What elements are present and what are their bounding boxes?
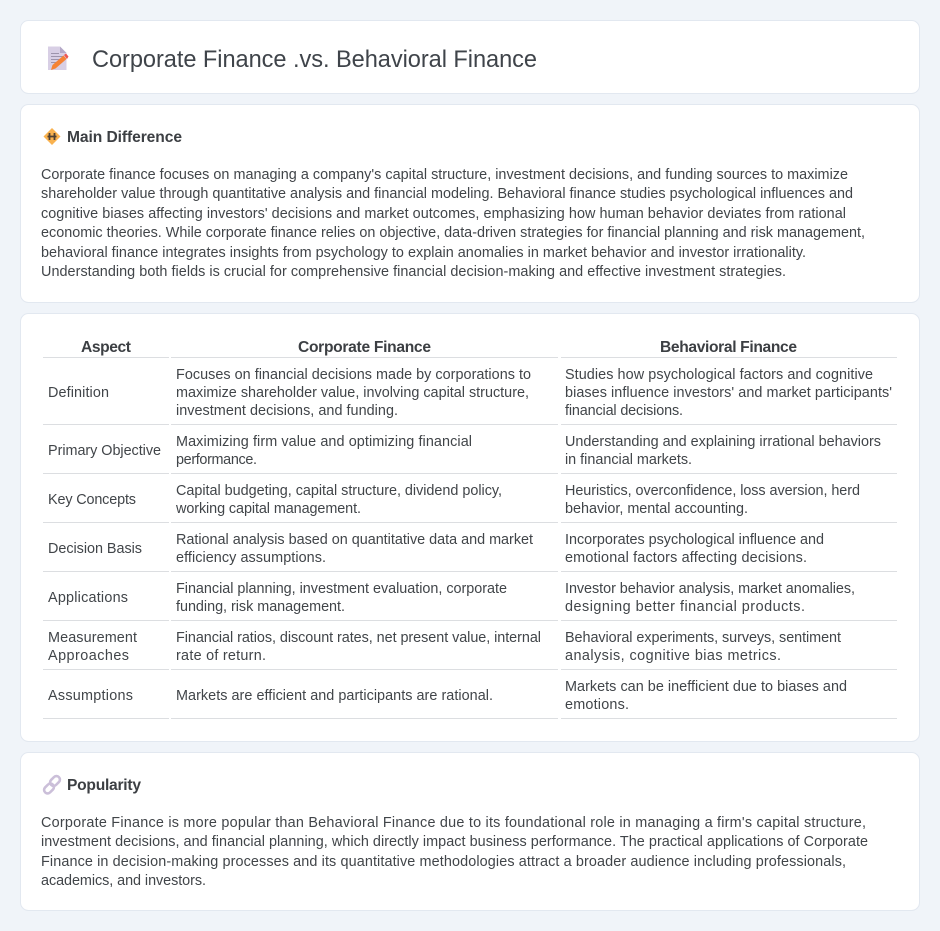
text block: popularity paragraph: Corporate Finance is more popular than Behavioral Finance due to its foundational role in managing a firm's capital structure,	[41, 815, 866, 831]
row: assumptions: Markets are efficient and participants are rational.	[176, 688, 493, 704]
row: measurement approaches: Behavioral experiments, surveys, sentiment	[565, 630, 841, 646]
text block: main difference paragraph: Corporate finance focuses on managing a company's capital structure, investment decisions, and funding sources to maximize	[41, 167, 848, 183]
row: decision basis: Rational analysis based on quantitative data and market	[176, 532, 533, 548]
row: primary objective: Maximizing firm value and optimizing financial	[176, 434, 472, 450]
text block: popularity paragraph: academics, and investors.	[41, 873, 206, 889]
row: definition: Studies how psychological factors and cognitive	[565, 367, 873, 383]
table header: Corporate Finance	[298, 339, 431, 356]
row: measurement approaches: Financial ratios, discount rates, net present value, internal	[176, 630, 541, 646]
row: decision basis: Incorporates psychological influence and	[565, 532, 824, 548]
table header	[81, 339, 797, 356]
title: Corporate Finance .vs. Behavioral Finance	[92, 47, 537, 73]
row: definition: financial decisions.	[565, 403, 683, 419]
row: key concepts	[48, 483, 860, 517]
row: definition: Focuses on financial decisions made by corporations to	[176, 367, 531, 383]
row: measurement approaches: Measurement	[48, 630, 137, 646]
table header: Aspect	[81, 339, 131, 356]
text block: main difference paragraph: shareholder value through quantitative analysis and financial modeling. Behavioral finance studies psychological influences and	[41, 186, 853, 202]
row: primary objective: in financial markets.	[565, 452, 692, 468]
text block: popularity paragraph: investment decisions, and financial planning, which directly impact business performance. The practical applications of Corporate	[41, 834, 868, 850]
row: applications: funding, risk management.	[176, 599, 345, 615]
row: primary objective: performance.	[176, 452, 257, 468]
panel: main difference	[20, 104, 920, 302]
text block: main difference paragraph: behavioral finance integrates insights from psychology to explain anomalies in market behavior and investor irrationality.	[41, 245, 806, 261]
row: definition: Definition	[48, 385, 109, 401]
panel: comparison table	[20, 314, 920, 742]
row: applications	[48, 581, 855, 615]
row: key concepts: working capital management.	[175, 501, 361, 517]
table header: Behavioral Finance	[660, 339, 797, 356]
text block: main difference paragraph: Understanding both fields is crucial for comprehensive financial decision-making and effective investment strategies.	[41, 264, 786, 280]
panel: popularity	[20, 752, 920, 910]
row: measurement approaches: Approaches	[48, 648, 129, 664]
heading: main difference: Main Difference	[67, 129, 182, 146]
row: definition: maximize shareholder value, involving capital structure,	[176, 385, 529, 401]
icon: chain link	[43, 775, 61, 795]
row: primary objective	[48, 434, 881, 468]
row: applications: Applications	[48, 590, 128, 606]
row: primary objective: Understanding and explaining irrational behaviors	[565, 434, 881, 450]
row: measurement approaches: rate of return.	[176, 648, 266, 664]
row: measurement approaches: analysis, cognitive bias metrics.	[565, 648, 781, 664]
text block: main difference paragraph: cognitive biases affecting investors' decisions and market outcomes, emphasizing how human behavior deviates from rational	[41, 206, 846, 222]
text block: popularity paragraph: Finance in decision-making processes and its quantitative methodologies attract a broader audience including professionals,	[41, 854, 846, 870]
row: key concepts: Key Concepts	[48, 492, 136, 508]
row: key concepts: behavior, mental accounting.	[565, 501, 748, 517]
row: primary objective: Primary Objective	[48, 443, 161, 459]
row: assumptions: Markets can be inefficient due to biases and	[565, 679, 847, 695]
row: decision basis: emotional factors affecting decisions.	[565, 550, 807, 566]
text block: main difference paragraph	[41, 167, 865, 280]
row: measurement approaches	[48, 630, 841, 664]
row: decision basis	[48, 532, 824, 566]
icon: orange diamond sign	[44, 128, 60, 145]
row: assumptions: emotions.	[565, 697, 629, 713]
row: decision basis: efficiency assumptions.	[176, 550, 326, 566]
row: definition: investment decisions, and funding.	[176, 403, 398, 419]
row: assumptions: Assumptions	[48, 688, 133, 704]
row: definition	[48, 367, 892, 419]
heading: popularity: Popularity	[67, 777, 141, 794]
row: decision basis: Decision Basis	[48, 541, 142, 557]
icon: document with pencil	[48, 46, 68, 70]
row: assumptions	[48, 679, 847, 713]
text block: popularity paragraph	[41, 815, 868, 889]
panel: title header	[20, 20, 920, 94]
text block: main difference paragraph: economic theories. While corporate finance relies on objective, data-driven strategies for financial planning and risk management,	[41, 225, 865, 241]
row: applications: designing better financial products.	[565, 599, 805, 615]
row: applications: Investor behavior analysis, market anomalies,	[565, 581, 855, 597]
row: definition: biases influence investors' and market participants'	[565, 385, 892, 401]
row: key concepts: Heuristics, overconfidence, loss aversion, herd	[565, 483, 860, 499]
row: applications: Financial planning, investment evaluation, corporate	[176, 581, 507, 597]
row: key concepts: Capital budgeting, capital structure, dividend policy,	[176, 483, 502, 499]
